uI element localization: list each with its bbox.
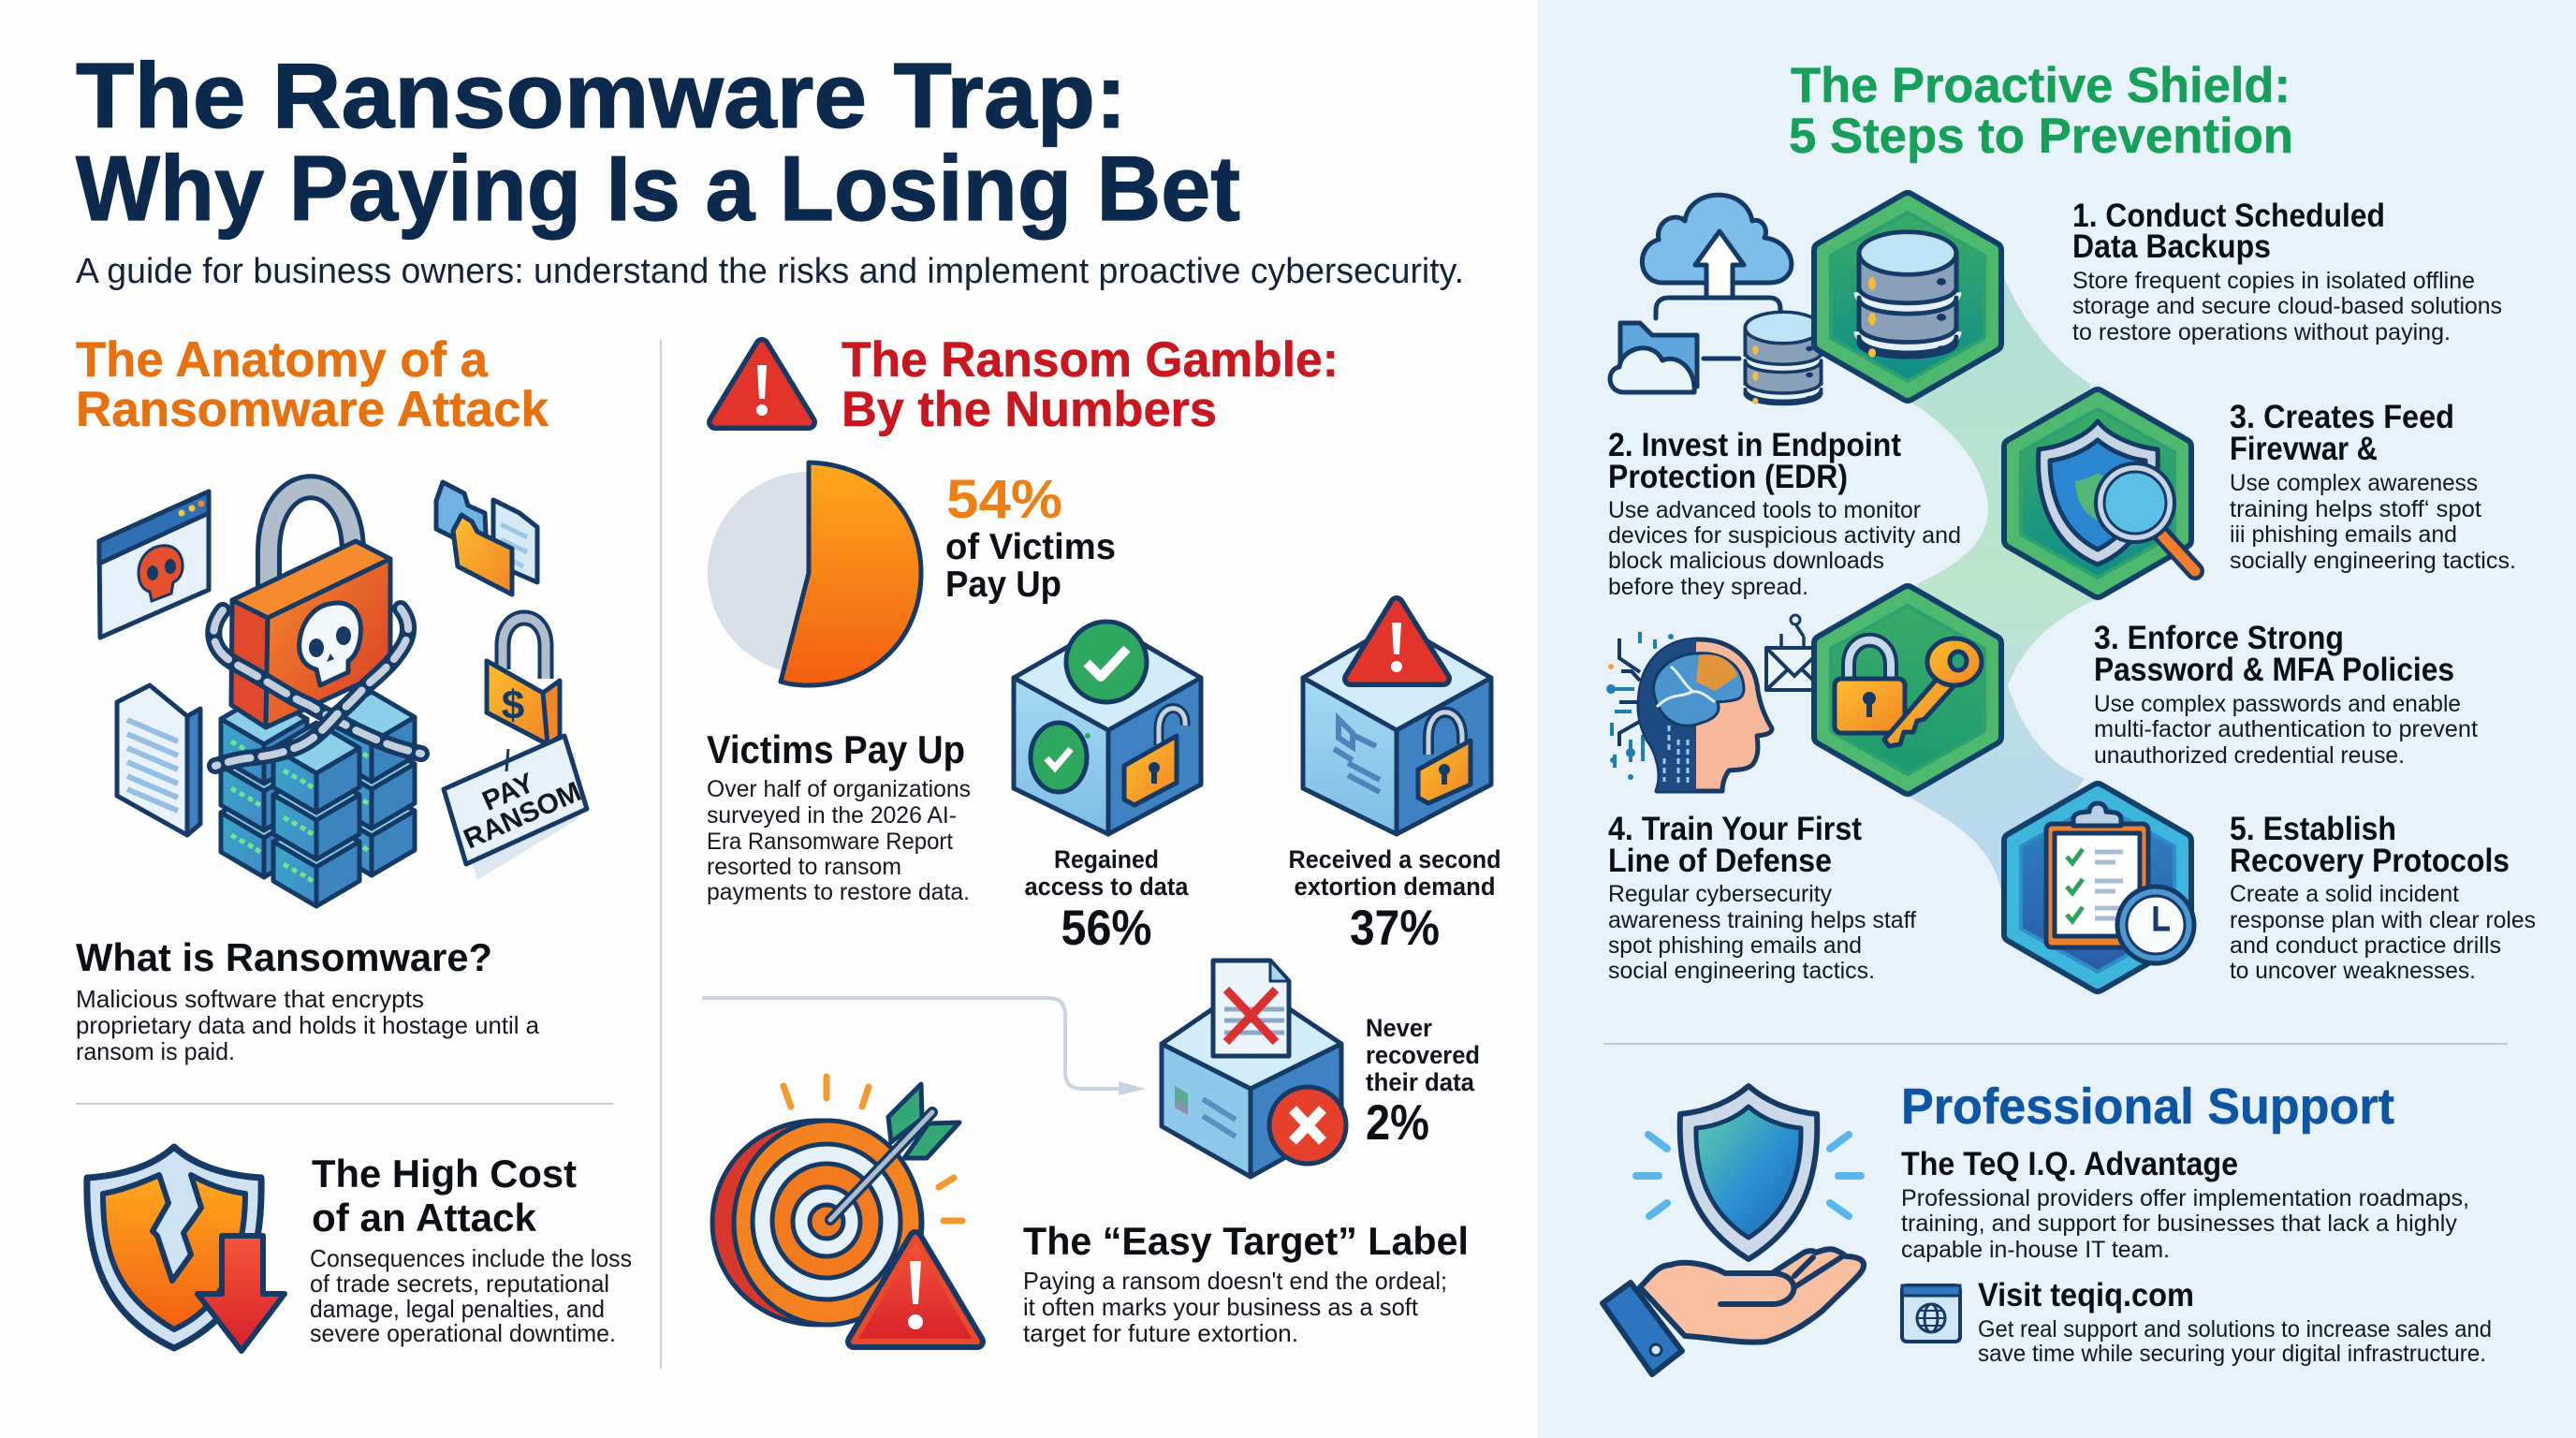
text: visit teqiq: Get real support and solutions to increase sales and [1978, 1316, 2492, 1343]
text: high cost: Consequences include the loss [310, 1244, 632, 1272]
server stack [221, 692, 415, 906]
icon: target with arrow and warning [712, 1077, 977, 1342]
heading: proactive shield: The Proactive Shield: [1791, 58, 2291, 113]
text: step 4: spot phishing emails and [1608, 932, 1862, 959]
text: second extortion [1288, 845, 1501, 956]
text: teq iq advantage: training, and support for businesses that lack a highly [1901, 1211, 2458, 1237]
text: step 4: 4. Train Your First [1608, 811, 1862, 847]
icon: web browser globe [1902, 1285, 1960, 1342]
text: step 1: 1. Conduct Scheduled [2072, 198, 2385, 234]
text: victims pay up: resorted to ransom [707, 854, 901, 880]
text: step 1: Store frequent copies in isolated offline [2072, 268, 2475, 294]
heading: anatomy [76, 332, 549, 437]
text: step 2 [1608, 427, 1961, 600]
text: step 2: Protection (EDR) [1608, 459, 1848, 495]
text: what is ransomware: Malicious software that encrypts [76, 985, 424, 1013]
chains [213, 609, 421, 766]
text: high cost: of an Attack [312, 1196, 537, 1240]
heading: proactive shield [1789, 58, 2293, 164]
text: step 5: to uncover weaknesses. [2230, 958, 2476, 984]
text: victims pay up: Victims Pay Up [707, 727, 965, 771]
text: teq iq advantage [1901, 1146, 2469, 1263]
text: what is ransomware: What is Ransomware? [76, 935, 492, 979]
icon: cracked shield with arrow [87, 1147, 285, 1351]
text: visit teqiq: Visit teqiq.com [1978, 1277, 2194, 1313]
icon: backup cloud and folder [1610, 195, 1822, 404]
text: never recovered: Never [1366, 1014, 1432, 1042]
text: victims pay up: Over half of organizations [707, 776, 971, 802]
text: step 5 [2230, 811, 2536, 984]
icon: skull [300, 603, 360, 685]
text: never recovered: their data [1366, 1068, 1475, 1096]
text: teq iq advantage: The TeQ I.Q. Advantage [1901, 1146, 2238, 1182]
text: easy target: Paying a ransom doesn't end the ordeal; [1023, 1267, 1447, 1295]
text: step 3 creates feed: 3. Creates Feed [2230, 399, 2454, 435]
ribbon connecting steps [1909, 278, 2097, 889]
text: high cost: severe operational downtime. [310, 1319, 616, 1347]
icon: head with brain and circuits [1606, 632, 1772, 791]
text: step 1: to restore operations without paying. [2072, 319, 2451, 345]
text: step 4: Regular cybersecurity [1608, 881, 1832, 907]
heading: ransom gamble [842, 332, 1339, 437]
text: regained: 56% [1061, 901, 1151, 956]
icon: hexagon with clipboard and clock [2012, 791, 2194, 984]
text: victims pay up: payments to restore data. [707, 879, 970, 905]
text: step 2: before they spread. [1608, 574, 1808, 600]
chart: pie 54% [708, 462, 921, 685]
text: step 4: awareness training helps staff [1608, 907, 1916, 933]
text: step 5: and conduct practice drills [2230, 932, 2501, 959]
heading: ransom gamble: The Ransom Gamble: [842, 332, 1339, 388]
text: step 3 enforce: multi-factor authentication to prevent [2094, 716, 2478, 742]
text: step 3 creates feed: iii phishing emails and [2230, 521, 2457, 548]
subtitle: A guide for business owners: understand the risks and implement proactive cybersecurity. [76, 252, 1464, 291]
icon: cube second extortion [1303, 604, 1491, 834]
text: what is ransomware: proprietary data and holds it hostage until a [76, 1011, 540, 1039]
icon: box never recovered [1162, 961, 1346, 1177]
stat: 54% of victims: 54% [946, 469, 1062, 530]
text: high cost: The High Cost [312, 1152, 577, 1196]
icon: cube regained access [1014, 622, 1201, 834]
text: step 3 creates feed: training helps stoff‘ spot [2230, 496, 2481, 522]
text: step 5: response plan with clear roles [2230, 907, 2536, 933]
text: step 5: 5. Establish [2230, 811, 2396, 847]
text: step 5: Recovery Protocols [2230, 843, 2510, 879]
text: step 3 creates feed: Use complex awareness [2230, 470, 2478, 496]
text: step 3 creates feed: Firevwar & [2230, 431, 2378, 467]
text: step 3 enforce: 3. Enforce Strong [2094, 620, 2344, 656]
text: step 1: Data Backups [2072, 228, 2271, 265]
icon: hexagon with lock and key [1822, 594, 1994, 786]
icon: hexagon with database [1822, 200, 1994, 393]
icon: shield in open hand [1603, 1086, 1864, 1374]
text: high cost: damage, legal penalties, and [310, 1295, 605, 1323]
text: easy target: target for future extortion. [1023, 1319, 1298, 1347]
icon: hexagon with shield and magnifier [2012, 397, 2195, 590]
title: Why Paying Is a Losing Bet [76, 137, 1240, 240]
background: right panel [1538, 0, 2576, 1438]
stat: 54% of victims: Pay Up [945, 565, 1061, 605]
text: visit teqiq: save time while securing your digital infrastructure. [1978, 1341, 2486, 1367]
text: regained: Regained [1054, 845, 1159, 873]
text: step 2: devices for suspicious activity and [1608, 522, 1961, 549]
text: victims pay up: surveyed in the 2026 AI- [707, 802, 957, 829]
icon: document [117, 685, 200, 835]
text: regained: access to data [1024, 873, 1189, 901]
icon: warning triangle [715, 345, 809, 422]
heading: anatomy: The Anatomy of a [76, 332, 489, 388]
icon: folders [436, 482, 537, 594]
title: The Ransomware Trap: [76, 44, 1127, 147]
text: never recovered: 2% [1366, 1095, 1429, 1151]
sign: pay ransom: PAY [478, 768, 539, 817]
heading: ransom gamble: By the Numbers [842, 382, 1217, 437]
text: easy target [1023, 1219, 1469, 1347]
background: left panel [0, 0, 1538, 1438]
heading: proactive shield: 5 Steps to Prevention [1789, 109, 2293, 164]
text: step 5: Create a solid incident [2230, 881, 2459, 907]
text: regained [1024, 845, 1189, 956]
text: step 2: block malicious downloads [1608, 548, 1884, 574]
icon: browser window with skull [99, 492, 209, 638]
text: step 2: Use advanced tools to monitor [1608, 497, 1921, 523]
stat: 54% of victims [945, 469, 1116, 605]
icon: phishing envelope and hook [1766, 615, 1823, 690]
title [76, 44, 1240, 240]
text: step 2: 2. Invest in Endpoint [1608, 427, 1901, 463]
text: victims pay up: Era Ransomware Report [707, 829, 953, 855]
stat: 54% of victims: of Victims [945, 527, 1116, 567]
text: second extortion: Received a second [1288, 845, 1501, 873]
text: step 4: Line of Defense [1608, 843, 1832, 879]
text: teq iq advantage: capable in-house IT team. [1901, 1237, 2170, 1263]
text: step 3 enforce [2094, 620, 2478, 769]
icon: small dollar padlock [487, 618, 560, 744]
text: step 3 creates feed: socially engineering tactics. [2230, 548, 2516, 574]
text: teq iq advantage: Professional providers offer implementation roadmaps, [1901, 1185, 2469, 1211]
text: step 3 enforce: Password & MFA Policies [2094, 652, 2454, 688]
heading: anatomy: Ransomware Attack [76, 382, 549, 437]
sign: pay ransom [444, 736, 587, 880]
illustration: locked servers [99, 482, 587, 906]
text: high cost: of trade secrets, reputational [310, 1269, 609, 1298]
text: second extortion: 37% [1350, 901, 1440, 956]
text: easy target: it often marks your business as a soft [1023, 1293, 1419, 1321]
text: never recovered: recovered [1366, 1041, 1480, 1069]
text: never recovered [1366, 1014, 1480, 1151]
heading: professional support: Professional Support [1901, 1078, 2394, 1135]
text: step 3 enforce: unauthorized credential reuse. [2094, 742, 2405, 769]
text: step 3 creates feed [2230, 399, 2516, 574]
text: step 3 enforce: Use complex passwords and enable [2094, 691, 2461, 717]
text: step 4: social engineering tactics. [1608, 958, 1875, 984]
text: high cost [310, 1152, 632, 1347]
text: step 1: storage and secure cloud-based solutions [2072, 293, 2502, 319]
text: visit teqiq [1978, 1277, 2492, 1367]
text: step 4 [1608, 811, 1916, 984]
text: what is ransomware [76, 935, 540, 1065]
sign: pay ransom: RANSOM [460, 776, 586, 856]
big padlock [231, 487, 390, 727]
text: second extortion: extortion demand [1294, 873, 1496, 901]
text: victims pay up [707, 727, 971, 905]
text: easy target: The “Easy Target” Label [1023, 1219, 1469, 1263]
text: what is ransomware: ransom is paid. [76, 1037, 235, 1065]
icon: small dollar padlock: $ [502, 682, 524, 728]
text: step 1 [2072, 198, 2502, 345]
arrow: to never recovered [702, 998, 1128, 1089]
